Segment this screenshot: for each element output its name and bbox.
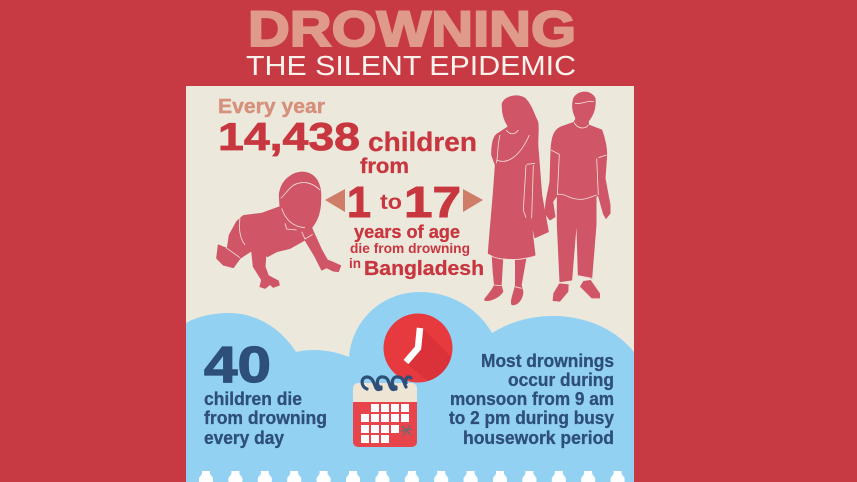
- subtitle: THE SILENT EPIDEMIC: [246, 50, 576, 81]
- panel: blue water wave: [186, 292, 634, 482]
- text: die from drowning: die from drowning: [350, 240, 470, 256]
- number: 1: 1: [347, 178, 371, 227]
- icon: crawling baby: [217, 172, 341, 288]
- text: from: from: [360, 155, 409, 178]
- icon: man: [545, 92, 610, 302]
- text: every day: every day: [204, 428, 284, 448]
- text: years of age: years of age: [354, 222, 460, 242]
- text: in: in: [349, 255, 361, 271]
- decorative row: white bottles: [199, 471, 625, 482]
- text: children: children: [368, 127, 477, 157]
- panel: statistics background: [186, 86, 634, 482]
- arrow: right: [463, 189, 483, 212]
- text: Bangladesh: Bangladesh: [364, 258, 484, 280]
- icon: calendar: [353, 377, 417, 447]
- title: DROWNING: [248, 1, 576, 57]
- text block: 40 children: [204, 336, 327, 448]
- icon: woman: [484, 96, 548, 305]
- icon: clock: [384, 314, 452, 382]
- number: 40: 40: [204, 336, 271, 393]
- text: to: to: [380, 191, 402, 214]
- text: from drowning: from drowning: [204, 408, 327, 428]
- arrow: left: [325, 189, 345, 212]
- number: 14,438: 14,438: [218, 116, 360, 159]
- text: children die: children die: [204, 389, 302, 409]
- text block: monsoon timing: [449, 351, 614, 448]
- number: 17: 17: [404, 178, 461, 227]
- text: line 2: occur during: [508, 370, 614, 390]
- label: every year: Every year: [218, 96, 325, 118]
- text: line 1: Most drownings: [481, 351, 614, 371]
- text: line 3: monsoon from 9 am: [450, 389, 614, 409]
- text: line 4: to 2 pm during busy: [449, 408, 614, 428]
- text: line 5: housework period: [463, 428, 614, 448]
- text block: children statistic: [218, 96, 484, 280]
